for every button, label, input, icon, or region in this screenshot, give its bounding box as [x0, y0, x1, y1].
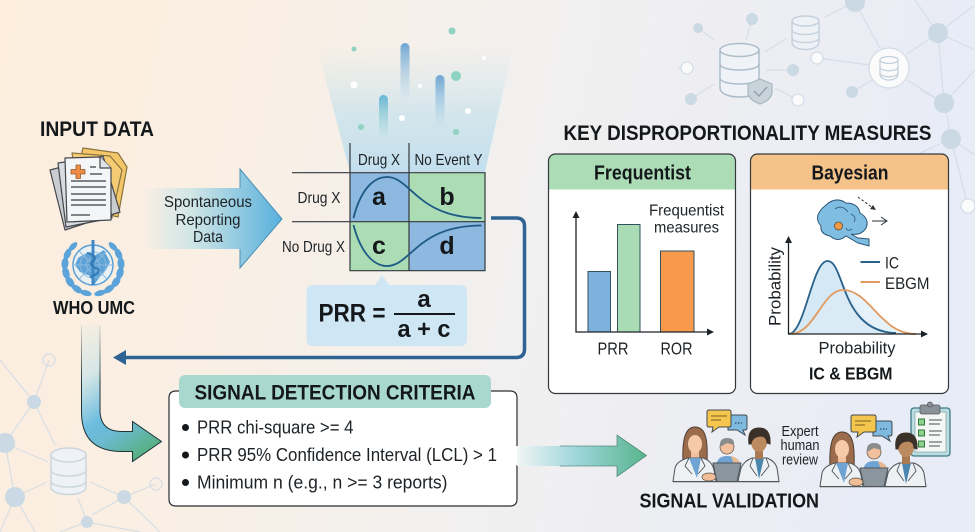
criteria list: Minimum n (e.g., n >= 3 reports) [197, 472, 448, 492]
heading pill [179, 375, 491, 408]
density chart: Probability [818, 340, 896, 358]
arrow: input to signal detection [82, 325, 162, 462]
label: WHO UMC: WHO UMC [53, 297, 135, 318]
contingency table: Drug X [298, 190, 341, 207]
icon: expert team two [820, 432, 926, 487]
bar chart: ROR [660, 338, 692, 358]
formula callout: PRR: a [417, 286, 431, 313]
note: frequentist measures: measures [654, 220, 719, 236]
arrow: spontaneous reporting data: Data [193, 229, 223, 246]
icon: cloud thinking [817, 197, 887, 246]
icon: WHO emblem [61, 240, 125, 297]
icon: background database with shield [720, 44, 772, 104]
formula callout: PRR [306, 275, 467, 346]
arrow: to signal validation [517, 435, 646, 476]
icon: clipboard checklist [911, 402, 950, 456]
bar chart [572, 211, 714, 358]
heading: key disproportionality measures: KEY DISPROPORTIONALITY MEASURES [564, 122, 932, 145]
icon: report documents [50, 148, 127, 230]
legend [860, 254, 930, 293]
contingency table: d [439, 232, 455, 260]
criteria list [182, 416, 497, 492]
panel: frequentist: Frequentist [594, 162, 691, 184]
contingency table: No Event Y [414, 152, 483, 169]
criteria list: PRR 95% Confidence Interval (LCL) > 1 [197, 444, 497, 465]
panel: bayesian: Bayesian [812, 162, 888, 184]
arrow: spontaneous reporting data [145, 169, 282, 268]
bar chart: PRR [598, 338, 628, 358]
contingency table [282, 143, 485, 271]
formula callout: PRR: a + c [398, 316, 450, 343]
legend: IC [885, 254, 899, 272]
text: expert human review: review [782, 452, 818, 468]
panel: bayesian [750, 154, 948, 394]
text: expert human review [780, 423, 820, 468]
panel: frequentist [548, 154, 736, 394]
density chart: Probability [766, 246, 784, 326]
legend: EBGM [885, 274, 930, 293]
contingency table: No Drug X [282, 239, 345, 256]
arrow: spontaneous reporting data: Reporting [176, 212, 240, 229]
caption: IC and EBGM: IC & EBGM [809, 364, 892, 384]
arrow: spontaneous reporting data: Spontaneous [164, 194, 252, 211]
icon: expert team one [673, 427, 779, 482]
text: expert human review: human [780, 437, 820, 454]
density chart [766, 236, 928, 358]
icon: background small database [792, 16, 819, 50]
note: frequentist measures: Frequentist [649, 202, 725, 220]
text: expert human review: Expert [782, 423, 819, 440]
formula callout: PRR: PRR = [318, 300, 386, 328]
panel: signal detection criteria [169, 375, 517, 506]
funnel of data with streaks and dots [317, 28, 513, 172]
contingency table: b [439, 183, 455, 211]
heading: signal validation: SIGNAL VALIDATION [640, 490, 819, 512]
heading text: SIGNAL DETECTION CRITERIA [194, 382, 476, 404]
icon: speech bubbles two [851, 415, 892, 441]
heading: input data: INPUT DATA [40, 118, 154, 141]
criteria list: PRR chi-square >= 4 [197, 416, 354, 438]
contingency table: Drug X [358, 152, 400, 169]
note: frequentist measures [649, 202, 725, 236]
icon: background database bottom left [51, 448, 86, 494]
arrow: result feedback connector [113, 218, 524, 365]
icon: background database in circle [880, 56, 898, 80]
contingency table: a [372, 183, 387, 211]
contingency table: c [372, 232, 386, 260]
icon: speech bubbles one [707, 410, 747, 435]
